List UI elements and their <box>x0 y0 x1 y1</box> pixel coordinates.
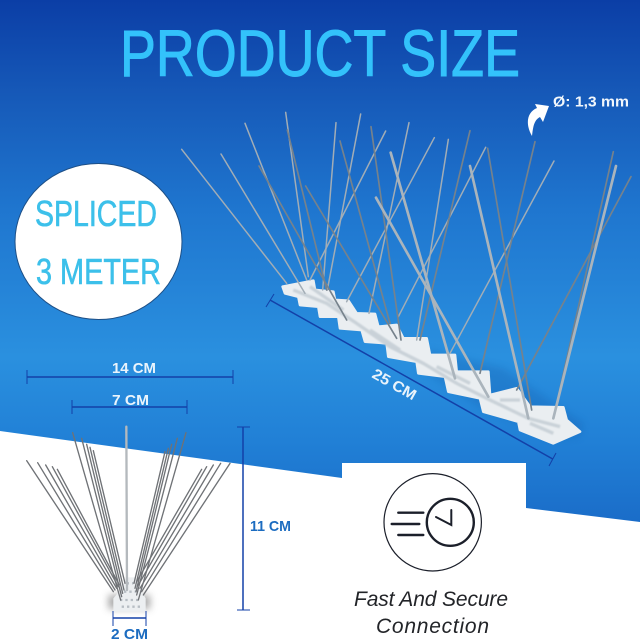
product: spike end view <box>27 427 230 612</box>
white diagonal lower area <box>0 431 640 640</box>
wires <box>27 427 230 600</box>
dimension: 7 cm <box>72 392 187 414</box>
wire diameter label: Ø: 1,3 mm <box>553 94 629 110</box>
icon: curved arrow <box>528 104 549 136</box>
caption: fast and secure connection: Connection <box>376 615 489 638</box>
base mottling <box>120 583 140 607</box>
badge: spliced 3 meter: SPLICED <box>35 193 157 234</box>
caption: fast and secure connection <box>354 588 508 638</box>
dimension: 7 cm: 7 CM <box>112 392 149 409</box>
icon: fast clock <box>384 474 481 571</box>
base shadow <box>108 595 150 609</box>
dimension: 25 cm: 25 CM <box>369 366 419 404</box>
product: bird spike strip <box>182 112 631 443</box>
title: PRODUCT SIZE <box>120 16 520 90</box>
strip base <box>283 281 580 443</box>
long spikes <box>182 112 631 418</box>
dimension: 2 cm <box>111 611 148 640</box>
strip detail <box>293 287 560 433</box>
dimension: 14 cm: 14 CM <box>112 360 156 377</box>
badge: spliced 3 meter <box>15 164 182 320</box>
strip shadow <box>417 350 583 440</box>
base <box>113 577 146 612</box>
badge: spliced 3 meter: 3 METER <box>36 251 161 292</box>
dimension: 11 cm: 11 CM <box>250 518 291 535</box>
dimension: 25 cm <box>266 294 556 466</box>
caption: fast and secure connection: Fast And Secure <box>354 588 508 611</box>
